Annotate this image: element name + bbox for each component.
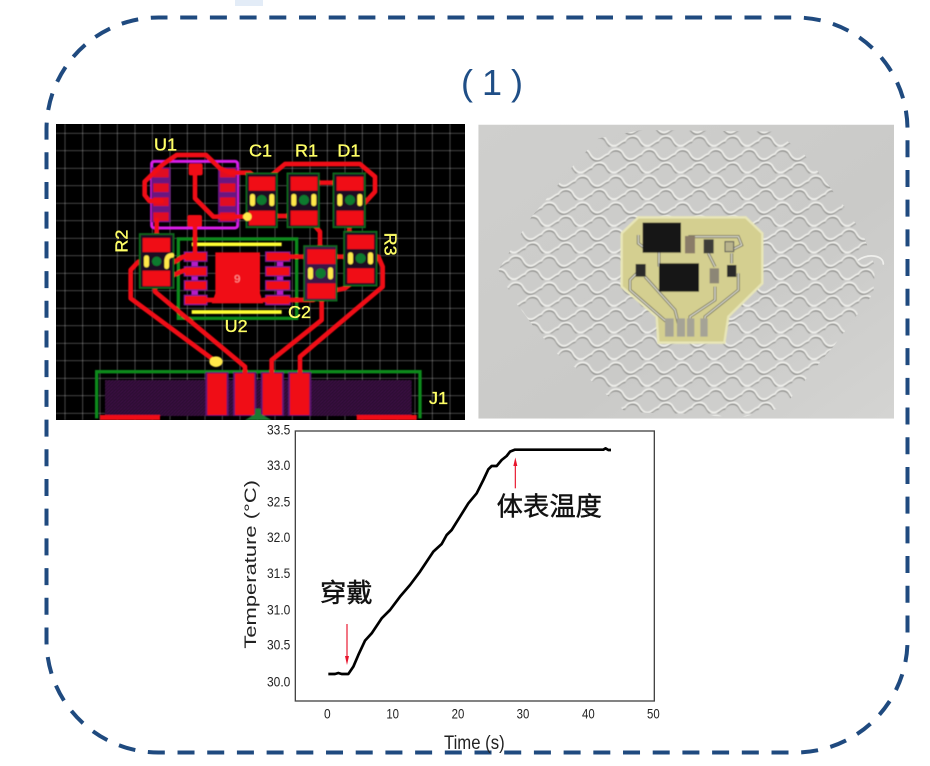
panel: PCB layout diagram [56, 124, 465, 420]
silver traces [630, 235, 742, 323]
component reference labels [111, 135, 448, 408]
footprint U2: 9 [234, 274, 240, 286]
y axis tick labels: 33.0 [267, 457, 291, 473]
arrow: wearing onset [345, 624, 349, 665]
grey paper background [478, 125, 894, 419]
x axis tick labels: 30 [517, 706, 530, 722]
temperature curve [328, 448, 611, 674]
y axis title: Temperature (°C) [241, 480, 260, 649]
y axis tick labels: 31.5 [267, 565, 291, 581]
label: body surface temperature: 体表温度 [497, 491, 602, 521]
component reference labels: C2 [288, 302, 311, 322]
y axis tick labels: 32.0 [267, 529, 291, 545]
small components [685, 236, 695, 253]
component reference labels: R2 [111, 230, 131, 253]
chart: temperature vs time [241, 422, 660, 754]
PCB artwork [97, 155, 420, 420]
pale blue tab at top edge [235, 0, 263, 6]
x axis title: Time (s) [444, 733, 505, 754]
PCB grid [56, 124, 465, 420]
x axis tick labels: 20 [452, 706, 465, 722]
component reference labels: U2 [225, 316, 248, 336]
vias [209, 212, 252, 367]
x axis tick labels: 40 [582, 706, 595, 722]
component reference labels: C1 [249, 141, 272, 161]
traces [131, 155, 383, 378]
serpentine tail [858, 256, 883, 264]
y axis tick labels: 30.0 [267, 673, 291, 689]
component reference labels: R1 [295, 141, 318, 161]
microchips [643, 223, 681, 253]
x axis tick labels: 10 [386, 706, 399, 722]
component reference labels: U1 [154, 135, 177, 155]
y axis tick labels: 31.0 [267, 602, 291, 618]
flexible circuit island [622, 217, 762, 343]
plot frame [295, 431, 654, 701]
two-pad components: C1, R1, D1, R2, C2, R3 [140, 173, 377, 301]
serpentine mesh [488, 127, 888, 423]
PCB black background [56, 124, 465, 420]
component reference labels: D1 [337, 141, 360, 161]
label: wearing: 穿戴 [320, 578, 373, 608]
footprint U2 [178, 239, 297, 318]
y axis tick labels: 32.5 [267, 493, 291, 509]
x axis tick labels: 0 [324, 706, 331, 722]
footprint J1 [97, 372, 420, 420]
y axis tick labels: 33.5 [267, 422, 291, 438]
y axis tick labels [267, 422, 291, 689]
footprint U1 [151, 161, 238, 228]
arrow: reaches body temperature [513, 457, 517, 488]
component reference labels: J1 [429, 388, 448, 408]
x axis tick labels: 50 [647, 706, 660, 722]
x axis tick labels [324, 706, 660, 722]
contact pads [665, 318, 708, 337]
panel: photo of the stretchable sensor patch [478, 125, 894, 423]
component reference labels: R3 [380, 233, 400, 256]
heading: (1): ( 1 ) [461, 62, 523, 103]
y axis tick labels: 30.5 [267, 637, 291, 653]
